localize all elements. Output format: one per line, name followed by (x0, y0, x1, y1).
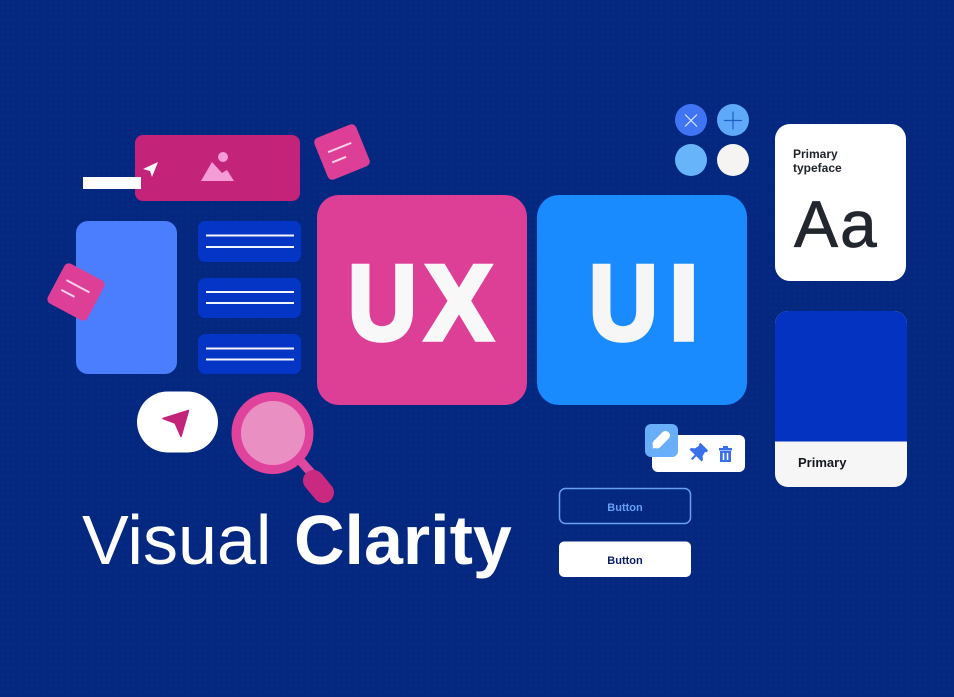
note: top (313, 123, 371, 181)
typeface card (775, 124, 906, 281)
title: Clarity (294, 501, 512, 579)
UX tile (317, 195, 527, 405)
colour swatch card (775, 311, 907, 487)
typeface card: typeface (793, 161, 842, 175)
white label bar (83, 177, 141, 189)
Aa specimen: Aa (794, 187, 877, 261)
UI label (589, 242, 699, 363)
note: left (46, 262, 106, 322)
image card (135, 135, 300, 201)
icon buttons (675, 104, 749, 176)
solid button (559, 542, 691, 577)
list rows (198, 221, 301, 374)
outline button: Button (607, 502, 643, 514)
UX label: U (348, 243, 417, 363)
icon: pin (686, 441, 710, 465)
icon: send (163, 410, 188, 436)
colour swatch card: Primary (798, 455, 847, 470)
UI label: U (589, 243, 658, 363)
send pill (137, 392, 218, 452)
magnifier (232, 392, 324, 492)
typeface card: Primary (793, 147, 838, 161)
icon: cursor arrow (143, 162, 158, 177)
title: Visual (82, 501, 271, 579)
UX label: X (425, 244, 493, 363)
phone panel (76, 221, 177, 374)
UI label: I (669, 242, 699, 362)
UI tile (537, 195, 747, 405)
icon: image (201, 152, 234, 181)
UX label (348, 243, 493, 363)
icon: pencil (645, 424, 678, 457)
outline button (560, 488, 690, 524)
solid button: Button (607, 555, 643, 567)
icon: trash (719, 446, 732, 462)
toolbar (645, 424, 745, 472)
